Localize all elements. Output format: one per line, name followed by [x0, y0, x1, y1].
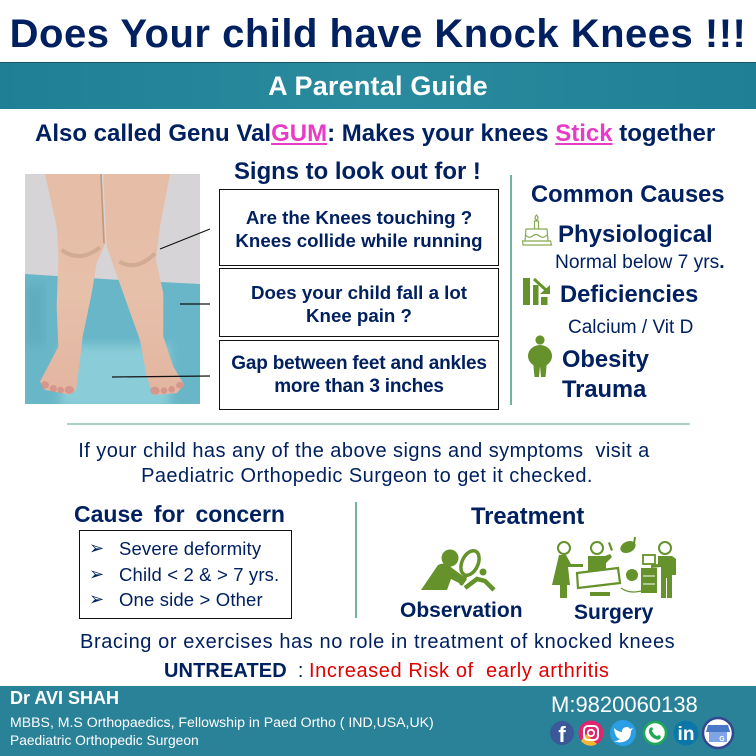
- concern list box: ➢: [89, 564, 104, 584]
- tagline: Also called Genu ValGUM: Makes your knees Stick together: [35, 120, 715, 147]
- advice text: Paediatric Orthopedic Surgeon to get it checked.: [141, 464, 593, 486]
- cause: trauma: Trauma: [562, 377, 646, 403]
- concern list box: Child < 2 & > 7 yrs.: [119, 564, 279, 584]
- label: surgery: Surgery: [574, 601, 653, 624]
- icon: surgery: [552, 537, 676, 598]
- sign box: knees touching: Knees collide while running: [235, 230, 483, 251]
- concern list box: One side > Other: [119, 589, 263, 610]
- cause note: normal: Normal below 7 yrs.: [555, 252, 725, 273]
- social icons: [550, 716, 734, 750]
- subtitle banner: [0, 62, 756, 109]
- social icons: G: [719, 736, 725, 743]
- icon: declining bars: [523, 278, 550, 305]
- title: Does Your child have Knock Knees !!!: [10, 12, 746, 56]
- untreated warning: UNTREATED : Increased Risk of early arthritis: [164, 660, 609, 682]
- heading: treatment: Treatment: [471, 504, 584, 530]
- bracing note: Bracing or exercises has no role in treatment of knocked knees: [80, 631, 675, 653]
- sign box: gap: Gap between feet and ankles: [231, 353, 487, 374]
- subtitle banner: A Parental Guide: [268, 71, 488, 101]
- heading: signs: Signs to look out for !: [234, 158, 481, 185]
- heading: common causes: Common Causes: [531, 182, 724, 208]
- concern list box: [79, 530, 292, 619]
- label: observation: Observation: [400, 599, 523, 622]
- advice text: If your child has any of the above signs and symptoms visit a: [78, 440, 650, 462]
- photo: knock knees: [25, 174, 200, 404]
- sign box: knees touching: Are the Knees touching ?: [246, 207, 472, 228]
- sign box: falls: Knee pain ?: [306, 305, 412, 326]
- cause: deficiencies: Deficiencies: [560, 282, 698, 308]
- icon: birthday cake: [522, 214, 552, 246]
- concern list box: ➢: [89, 589, 104, 610]
- qualifications: MBBS, M.S Orthopaedics, Fellowship in Paed Ortho ( IND,USA,UK): [10, 714, 434, 730]
- advice text: [78, 440, 650, 486]
- concern list box: Severe deformity: [119, 538, 261, 559]
- sign box: knees touching: [219, 189, 499, 266]
- social icons: in: [678, 724, 694, 745]
- icon: obese person: [528, 335, 552, 377]
- social icons: f: [558, 722, 566, 747]
- sign box: falls: [219, 268, 499, 337]
- speciality: Paediatric Orthopedic Surgeon: [10, 733, 199, 748]
- footer banner: [0, 686, 756, 756]
- cause note: calcium: Calcium / Vit D: [568, 317, 693, 338]
- sign box: gap: [219, 340, 499, 410]
- sign box: falls: Does your child fall a lot: [251, 282, 467, 303]
- phone: M:9820060138: [551, 692, 698, 717]
- heading: cause for concern: Cause for concern: [74, 501, 285, 527]
- sign box: gap: more than 3 inches: [274, 376, 444, 397]
- doctor name: Dr AVI SHAH: [10, 688, 119, 708]
- cause: physiological: Physiological: [558, 221, 713, 248]
- cause: obesity: Obesity: [562, 347, 649, 373]
- concern list box: ➢: [89, 538, 104, 559]
- icon: observation: [421, 549, 496, 592]
